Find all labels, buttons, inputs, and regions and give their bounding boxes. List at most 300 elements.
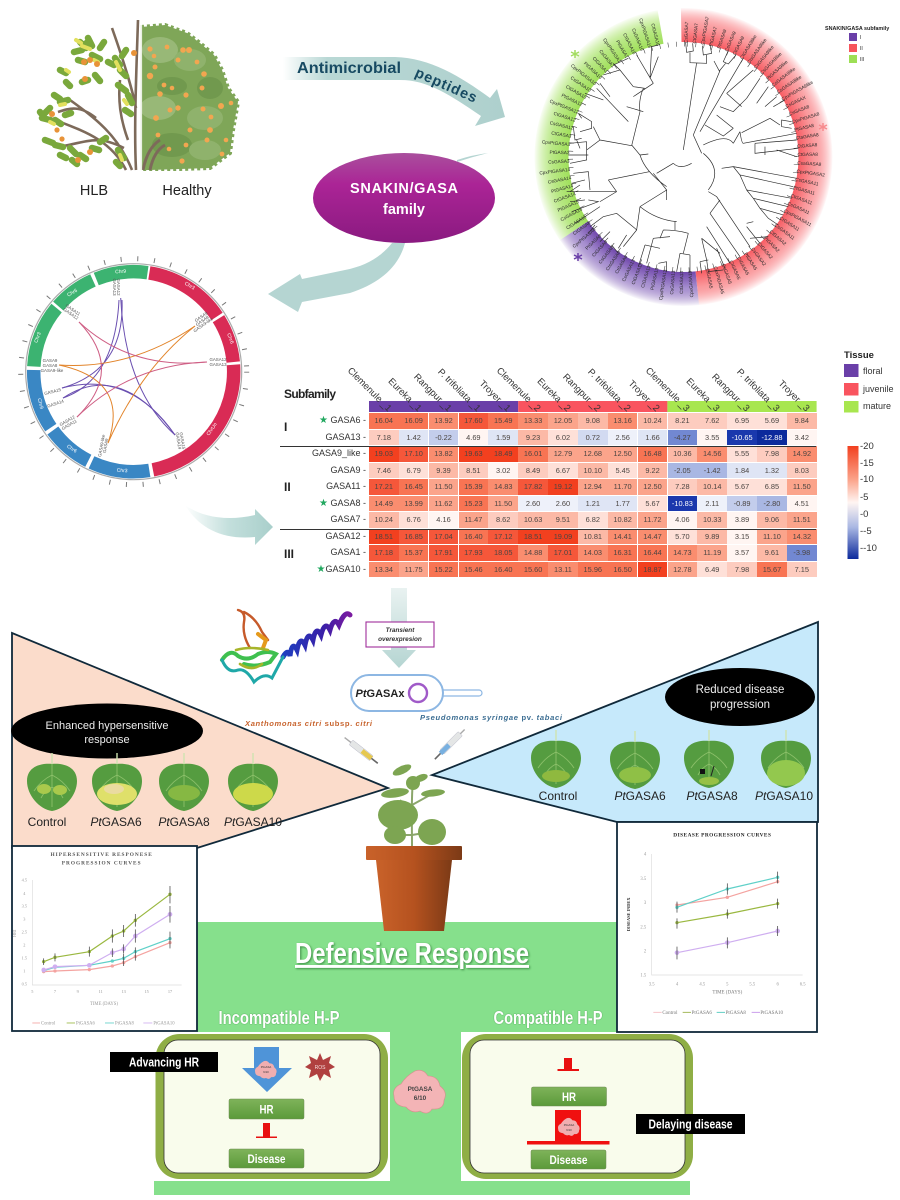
tree labels: subfamily II: PtGASA2 <box>763 235 781 253</box>
heatmap: expression values: -12.88 <box>761 432 782 442</box>
chart: hypersensitive response progression: 1.5 <box>22 956 27 961</box>
heatmap: expression values: 14.92 <box>793 449 811 458</box>
chart: hypersensitive response progression: 15 <box>144 989 149 994</box>
chart: disease progression curves: 5 <box>726 983 729 988</box>
heatmap: expression values: 4.69 <box>466 432 481 442</box>
tree labels: subfamily III: CpxPtGASA16 <box>638 18 653 49</box>
tree labels: subfamily III: CtGASA14 <box>553 191 577 204</box>
chart: disease progression curves: TIME (DAYS) <box>712 991 743 996</box>
tree labels: subfamily II: CsGASA2 <box>750 247 767 267</box>
heatmap: expression values: 6.76 <box>406 515 421 524</box>
heatmap: expression values: 6.95 <box>735 416 749 425</box>
tree labels: subfamily I: CtGASA6 <box>572 220 592 236</box>
legend: tissue: floral <box>863 366 883 376</box>
bacterium with PtGASAx plasmid: PtGASAx <box>356 688 405 700</box>
heatmap: expression values: 14.32 <box>793 532 811 540</box>
tree labels: subfamily II: CtGASA11 <box>790 193 813 206</box>
chart: hypersensitive response progression: 11 <box>99 989 103 994</box>
gene labels: GASA12 <box>59 414 76 427</box>
tree labels: subfamily III: CtGASA15 <box>565 214 588 230</box>
heatmap: expression values: 18.51 <box>375 532 393 540</box>
heatmap: expression values: 3.55 <box>705 432 719 442</box>
legend: tissue: mature <box>863 401 891 411</box>
button: HR: HR <box>260 1102 274 1116</box>
label: Delaying disease <box>636 1114 745 1134</box>
heatmap: expression values: 13.16 <box>613 416 632 425</box>
tree branches <box>567 43 798 273</box>
tree labels: subfamily III: CsGASA14 <box>547 175 572 185</box>
heatmap: expression values: 13.82 <box>434 449 453 458</box>
heatmap: expression values: 11.50 <box>494 498 512 508</box>
box: transient overexpression: Transient <box>386 627 415 634</box>
heatmap: expression values: 10.24 <box>375 515 393 524</box>
tree labels: subfamily II: CtGASA8 <box>797 152 818 157</box>
tree labels: subfamily III: PtGASA10 <box>583 61 603 80</box>
chromosome labels <box>33 269 235 474</box>
heatmap: expression values: 6.49 <box>705 564 719 574</box>
tree labels: subfamily III: PtGASA15 <box>557 199 580 213</box>
heatmap: expression values: -3.98 <box>793 548 810 557</box>
heatmap: expression values: 14.47 <box>643 532 662 540</box>
heatmap: expression values: 13.33 <box>524 416 542 425</box>
chart: disease progression curves: 6.5 <box>800 983 806 988</box>
ellipse: enhanced hypersensitive response: response <box>84 734 130 746</box>
leaf labels: hypersensitive assay: PtGASA8 <box>158 815 210 829</box>
heading: Compatible H-P: Compatible H-P <box>494 1008 602 1028</box>
tree labels: subfamily III: CsGASA12 <box>549 120 574 131</box>
heatmap: expression values: 12.50 <box>613 449 632 458</box>
heatmap: expression values: 9.06 <box>765 515 779 524</box>
tree markers <box>571 50 827 261</box>
heatmap: expression values: 9.22 <box>645 466 660 474</box>
heatmap: expression values: 7.28 <box>675 482 690 491</box>
heatmap: expression values: 10.36 <box>673 449 692 458</box>
tree labels: subfamily III: CpxPtGASA12 <box>549 99 580 115</box>
colorbar legend: -10 <box>860 474 874 485</box>
ellipse: SNAKIN/GASA family: SNAKIN/GASA <box>350 181 459 197</box>
heatmap: expression values: 10.82 <box>613 515 632 524</box>
gene labels: GASA13 <box>112 278 117 296</box>
tree labels: subfamily I: CtGASA6 <box>614 254 629 275</box>
heatmap: expression values: 8.03 <box>795 466 809 474</box>
heatmap row labels: ★ GASA6 - <box>319 415 366 426</box>
tree labels: subfamily III: CtGASA16 <box>650 23 661 47</box>
label: Pseudomonas: Pseudomonas syringae pv. tabaci <box>420 713 563 722</box>
heatmap: expression values: 4.51 <box>795 498 809 508</box>
heatmap: expression values <box>369 413 817 577</box>
heatmap: expression values: 11.50 <box>793 482 811 491</box>
heatmap: expression values: 5.45 <box>615 466 630 474</box>
heatmap: expression values: 9.23 <box>526 432 540 442</box>
heatmap: expression values: 10.81 <box>584 532 602 540</box>
chart: hypersensitive response progression: 1 <box>23 968 25 973</box>
chart: hypersensitive response progression: 9 <box>77 989 79 994</box>
chart: hypersensitive response progression: HIPERSENSITIVE RESPONESE <box>50 852 153 858</box>
heatmap: expression values: 11.47 <box>464 515 482 524</box>
tree labels: subfamily II: CpxPtGASA9like <box>781 80 814 102</box>
tree labels: subfamily II: CsGASA9 <box>724 30 737 52</box>
heatmap: expression values: 18.51 <box>524 532 542 540</box>
tree labels: subfamily II <box>683 16 825 295</box>
tree labels: subfamily III: CtGASA3 <box>551 130 572 139</box>
chromosome labels: Chr3 <box>116 468 128 474</box>
chart: disease progression curves: 3.5 <box>649 983 655 988</box>
chart: hypersensitive response progression: PtGASA10 <box>153 1022 175 1027</box>
tree labels: subfamily I: CtGASA13 <box>640 265 652 288</box>
chart: hypersensitive response progression: HRI <box>12 929 17 937</box>
protein structure <box>222 610 350 682</box>
heatmap: expression values: 15.39 <box>464 482 483 491</box>
heatmap: expression values: -0.22 <box>435 432 452 442</box>
heatmap: expression values: 3.02 <box>496 466 510 474</box>
leaf labels: hypersensitive assay <box>28 815 282 829</box>
heading: Subfamily: Subfamily <box>284 387 336 401</box>
heatmap header: samples and tissue bar: Eureka _3 <box>684 375 722 413</box>
heatmap header: samples and tissue bar: Clemenule _1 <box>346 365 394 413</box>
tree labels: subfamily III: PtGASA3 <box>549 150 570 155</box>
chromosome labels: Chr6 <box>225 333 235 345</box>
heatmap: expression values: 12.05 <box>554 416 572 425</box>
heatmap header: samples and tissue bar: P. trifoliata _3 <box>735 366 782 413</box>
tree labels: subfamily II: CsGASAX <box>785 95 807 109</box>
chart: hypersensitive response progression: PROGRESSION CURVES <box>62 860 142 866</box>
tree labels: subfamily III: CtGASA10 <box>565 84 588 100</box>
button: HR <box>532 1087 606 1106</box>
heatmap: expression values: 9.39 <box>436 466 451 474</box>
heatmap row labels: ★GASA10 - <box>316 564 366 574</box>
tree labels: subfamily II: CtGASA5 <box>729 260 742 281</box>
tree labels: subfamily II: CsGASA9like <box>759 51 783 75</box>
ellipse: enhanced hypersensitive response: Enhanced hypersensitive <box>46 720 168 732</box>
label: peptides: peptides <box>412 65 479 106</box>
legend: SNAKIN/GASA subfamily: II <box>860 46 863 52</box>
leaves: disease assay <box>531 730 811 789</box>
chart: disease progression curves: PtGASA8 <box>726 1011 746 1016</box>
gene labels: GASA9 <box>102 438 109 453</box>
gene labels: GASA13 <box>209 362 227 367</box>
heatmap: expression values: 3.42 <box>795 432 809 442</box>
heatmap: expression values: 3.15 <box>735 532 749 540</box>
heatmap: expression values: 4.16 <box>436 515 451 524</box>
tree labels: subfamily III: CpxPtGASA3 <box>542 139 571 147</box>
heatmap: expression values: 15.67 <box>763 564 781 574</box>
legend: tissue: juvenile <box>862 384 894 394</box>
triangle: hypersensitive panel <box>12 633 388 848</box>
blob: PtGASA 6/10 central <box>394 1070 445 1113</box>
leaf labels: disease assay: PtGASA10 <box>755 789 813 803</box>
leaf labels: disease assay <box>539 789 813 803</box>
tree labels: subfamily II: CtaGASA8 <box>796 132 819 141</box>
heatmap: expression values: 15.96 <box>584 564 602 574</box>
heatmap: expression values: 10.14 <box>703 482 721 491</box>
phylogenetic tree <box>500 0 867 340</box>
heatmap: expression values: 18.49 <box>494 449 512 458</box>
tree labels: subfamily I: PtGASA6 <box>584 233 602 251</box>
tree labels: subfamily III: CsGASA16 <box>631 28 645 52</box>
heading: Incompatible H-P: Incompatible H-P <box>218 1008 340 1028</box>
heading: Defensive Response: Defensive Response <box>295 938 529 970</box>
heatmap row labels: GASA13 - <box>325 432 366 442</box>
heatmap: expression values: 3.57 <box>735 548 749 557</box>
illustration: HLB vs healthy citrus tree <box>40 20 238 170</box>
chart: disease progression curves: DISEASE INDEX <box>626 897 631 931</box>
tree labels: subfamily II: CtGASA9like <box>739 34 758 60</box>
label: Advancing HR <box>110 1052 218 1072</box>
heatmap: expression values: 16.01 <box>524 449 542 458</box>
tree labels: subfamily I <box>572 220 694 301</box>
heatmap: expression values: 9.08 <box>586 416 600 425</box>
arrow: family to synteny <box>268 153 488 312</box>
heatmap: expression values: 10.10 <box>584 466 602 474</box>
tree labels: subfamily III: CsGASA3 <box>548 159 570 165</box>
arrow: antimicrobial peptides <box>283 57 505 126</box>
chart: disease progression curves: 4.5 <box>699 983 706 988</box>
ellipse: enhanced hypersensitive response <box>11 704 203 758</box>
box: transient overexpression: overexpresion <box>378 636 422 643</box>
tree labels: subfamily II: PtGASA8 <box>794 123 815 132</box>
tree labels: subfamily II: CsGASA9like <box>753 44 775 70</box>
chromosome labels: Chr3 <box>183 281 196 292</box>
heatmap: expression values: 14.88 <box>524 548 542 557</box>
chromosome labels: Chr9 <box>115 269 126 275</box>
tree labels: subfamily II: CtsGASA9like <box>746 37 768 65</box>
tree labels: subfamily II: PtGASA7 <box>708 26 718 47</box>
heatmap: expression values: -1.42 <box>704 466 721 474</box>
gene labels: GASA8 <box>195 314 210 327</box>
heatmap: expression values: -10.83 <box>672 498 693 508</box>
heatmap: expression values: 17.12 <box>494 532 512 540</box>
blob: PtGASA 6/10 small: PtGASA <box>261 1065 271 1069</box>
heatmap: expression values: 7.15 <box>795 564 809 574</box>
blob: PtGASA 6/10 small: 6/10 <box>263 1070 269 1074</box>
heatmap row labels: GASA11 - <box>326 481 366 491</box>
heatmap: expression values: 8.51 <box>466 466 481 474</box>
heatmap: expression values: 12.50 <box>643 482 662 491</box>
gene labels: GASA12 <box>116 278 121 296</box>
heatmap: expression values: 14.49 <box>375 498 393 508</box>
heatmap: expression values: 1.21 <box>586 498 600 508</box>
heatmap: expression values: 18.05 <box>494 548 512 557</box>
chromosome labels: Chr3 <box>33 331 43 344</box>
heatmap row labels: GASA9_like - <box>312 448 366 458</box>
heatmap header: samples and tissue bar: Troyer _3 <box>776 378 812 413</box>
heatmap: expression values: 11.10 <box>763 532 781 540</box>
triangle: disease panel <box>432 622 818 822</box>
heatmap: expression values: 17.21 <box>375 482 393 491</box>
heatmap: expression values: 1.32 <box>765 466 779 474</box>
heatmap: expression values: 16.40 <box>494 564 512 574</box>
heatmap: expression values: 16.40 <box>464 532 483 540</box>
heatmap: expression values: 14.03 <box>584 548 602 557</box>
heatmap: expression values: 8.62 <box>496 515 510 524</box>
heatmap: expression values: 16.09 <box>404 416 423 425</box>
leaf labels: disease assay: Control <box>539 789 577 803</box>
chart: hypersensitive response progression: 3.5 <box>22 903 27 908</box>
star: ROS <box>305 1053 335 1081</box>
heatmap header: samples and tissue bar: Troyer _1 <box>477 378 513 413</box>
tree labels: subfamily III: CtGASA16 <box>622 32 637 55</box>
subfamily labels: II <box>284 480 291 494</box>
heatmap: expression values: 19.09 <box>554 532 572 540</box>
heatmap: expression values: 1.42 <box>406 432 421 442</box>
heatmap: expression values: 17.91 <box>434 548 453 557</box>
heatmap: expression values: 7.98 <box>735 564 749 574</box>
blob: PtGASA 6/10 small: PtGASA <box>564 1123 574 1127</box>
tree labels: subfamily III: CsGASA15 <box>560 206 583 222</box>
label: HLB: HLB <box>80 183 108 199</box>
heatmap: expression values: 17.10 <box>404 449 423 458</box>
tree labels: subfamily I: CtGASA13 <box>679 271 684 294</box>
box: transient overexpression <box>366 622 434 647</box>
tree labels: subfamily II: CsGASA9like <box>771 66 797 88</box>
tree labels: subfamily I: CtsGASA6 <box>605 250 622 272</box>
tree labels: subfamily II: CpxPtGASA2 <box>796 169 825 178</box>
heatmap: expression values: 15.46 <box>464 564 483 574</box>
gene labels: GASA14 <box>47 398 65 409</box>
ellipse: reduced disease progression: Reduced disease <box>696 684 784 696</box>
heatmap: expression values: 4.06 <box>675 515 690 524</box>
heatmap: expression values: -2.05 <box>674 466 691 474</box>
blob: PtGASA 6/10 small: 6/10 <box>566 1128 572 1132</box>
blob: PtGASA 6/10 central: 6/10 <box>414 1095 427 1102</box>
gene labels: GASA15 <box>44 387 62 396</box>
heatmap: expression values: 18.87 <box>643 564 662 574</box>
chromosome labels: Chr6 <box>65 444 78 455</box>
tree labels: subfamily II: CsGASA5 <box>721 263 733 285</box>
heatmap header: samples and tissue bar: Rangpur _1 <box>412 371 454 413</box>
tree labels: subfamily II: CtGASA11 <box>779 216 801 232</box>
heatmap: expression values: 7.98 <box>765 449 779 458</box>
heatmap: expression values: 12.78 <box>673 564 692 574</box>
subfamily labels: III <box>284 547 294 561</box>
tree labels: subfamily I: CpxPtGASA13 <box>658 269 668 301</box>
chromosome labels: Chr6 <box>66 288 79 298</box>
heatmap: expression values: 13.99 <box>404 498 423 508</box>
heatmap: expression values: 2.11 <box>705 498 719 508</box>
chart: hypersensitive response progression: 2.5 <box>22 930 27 935</box>
leaf labels: disease assay: PtGASA8 <box>686 789 738 803</box>
heatmap: expression values: 13.34 <box>375 564 393 574</box>
heatmap: expression values: 6.67 <box>556 466 570 474</box>
heatmap header: samples and tissue bar: P. trifoliata _2 <box>586 366 633 413</box>
clade colored ring <box>500 0 867 340</box>
heatmap: expression values: 6.82 <box>586 515 600 524</box>
tree labels: subfamily II: CsGASA9like <box>776 74 803 94</box>
heatmap: expression values: 14.83 <box>494 482 512 491</box>
gene labels: GASA11 <box>65 303 82 317</box>
heatmap: expression values: 19.12 <box>554 482 572 491</box>
arrow: advancing HR <box>242 1047 292 1092</box>
chart: hypersensitive response progression: 7 <box>54 989 57 994</box>
chart: disease progression curves: PtGASA10 <box>760 1011 784 1016</box>
heatmap: expression values: 2.60 <box>526 498 540 508</box>
chart: disease progression curves: 4 <box>676 983 679 988</box>
chart: disease progression curves: 2 <box>644 950 647 955</box>
tree labels: subfamily II: CtGASA7 <box>692 23 699 44</box>
syringe: left <box>343 735 380 766</box>
heatmap: expression values: 11.62 <box>435 498 452 508</box>
heatmap: expression values: 15.23 <box>464 498 483 508</box>
chart: disease progression curves: 2.5 <box>640 925 647 930</box>
tree labels: subfamily II: CsGASA11 <box>774 223 796 241</box>
chart: disease progression curves: 4 <box>644 853 647 858</box>
tree labels: subfamily II: CpxPtGASA7 <box>700 16 710 45</box>
tree labels: subfamily II: CtGASA2 <box>757 241 774 260</box>
blob: PtGASA 6/10 central: PtGASA <box>408 1086 433 1093</box>
heatmap: expression values: 16.04 <box>375 416 393 425</box>
heatmap: expression values: 5.67 <box>735 482 749 491</box>
subfamily labels: I <box>284 420 287 434</box>
legend: tissue: Tissue <box>844 350 874 361</box>
heatmap: expression values: 5.67 <box>645 498 660 508</box>
tree labels: subfamily III: CpxPtGASA14 <box>539 167 571 176</box>
heatmap: expression values: 1.59 <box>496 432 510 442</box>
arrow: synteny to heatmap <box>185 505 273 545</box>
ellipse: SNAKIN/GASA family: family <box>383 202 425 218</box>
gene labels <box>41 278 227 457</box>
leaf labels: hypersensitive assay: PtGASA6 <box>90 815 142 829</box>
heatmap: expression values: 16.44 <box>643 548 662 557</box>
ellipse: reduced disease progression <box>665 668 815 726</box>
heatmap: expression values: 16.85 <box>404 532 423 540</box>
colorbar legend: --10 <box>860 543 877 554</box>
heatmap: expression values: 12.79 <box>554 449 572 458</box>
tree labels: subfamily II: PtGASA9like <box>765 59 789 81</box>
heatmap: expression values: 11.50 <box>435 482 452 491</box>
heatmap header: samples and tissue bar: Rangpur _3 <box>710 371 752 413</box>
legend: SNAKIN/GASA subfamily: I <box>860 35 861 41</box>
heatmap: expression values: 16.31 <box>613 548 632 557</box>
heatmap header: samples and tissue bar: Troyer _2 <box>626 378 662 413</box>
gene labels: GASA9-like <box>97 434 106 457</box>
bacterium with PtGASAx plasmid <box>351 675 482 711</box>
heatmap: expression values: 17.60 <box>464 416 483 425</box>
legend: SNAKIN/GASA subfamily: III <box>860 57 864 63</box>
heatmap: expression values: 16.45 <box>404 482 423 491</box>
tree labels: subfamily III: CsGASA1 <box>598 49 616 69</box>
legend: tissue <box>844 350 894 412</box>
heatmap row labels <box>312 415 366 574</box>
gene labels: GASA11 <box>61 418 78 431</box>
heatmap: expression values: 9.51 <box>556 515 570 524</box>
chromosome ring <box>0 231 275 513</box>
arrow: down to plasmid <box>382 588 416 668</box>
heatmap: expression values: 12.94 <box>584 482 602 491</box>
heatmap: expression values: 17.01 <box>554 548 572 557</box>
colorbar legend: --5 <box>860 526 872 537</box>
syringe: right <box>433 727 467 761</box>
chart: disease progression curves: DISEASE PROGRESSION CURVES <box>673 832 771 838</box>
tree labels: subfamily II: PtGASA11 <box>793 185 816 196</box>
button: Disease <box>531 1150 606 1169</box>
inhibition bar <box>558 1058 579 1071</box>
legend: SNAKIN/GASA subfamily <box>825 26 889 63</box>
chart: hypersensitive response progression: PtGASA8 <box>115 1022 135 1027</box>
colorbar legend: -15 <box>860 458 874 469</box>
inhibition bar <box>256 1123 277 1138</box>
chromosome labels: Chr9 <box>36 398 44 410</box>
chart: disease progression curves <box>617 822 817 1032</box>
tree labels: subfamily III <box>539 18 661 230</box>
tree labels: subfamily I: CsGASA13 <box>669 270 676 295</box>
heatmap: expression values: 13.11 <box>554 564 572 574</box>
star: ROS: ROS <box>315 1065 326 1071</box>
chromosome labels: ChrUn <box>206 422 219 437</box>
heatmap: expression values: 11.19 <box>703 548 721 557</box>
leaf labels: disease assay: PtGASA6 <box>614 789 666 803</box>
tree labels: subfamily I: PtGASA13 <box>650 267 659 291</box>
tree labels: subfamily III: CtGASA1 <box>591 56 609 74</box>
